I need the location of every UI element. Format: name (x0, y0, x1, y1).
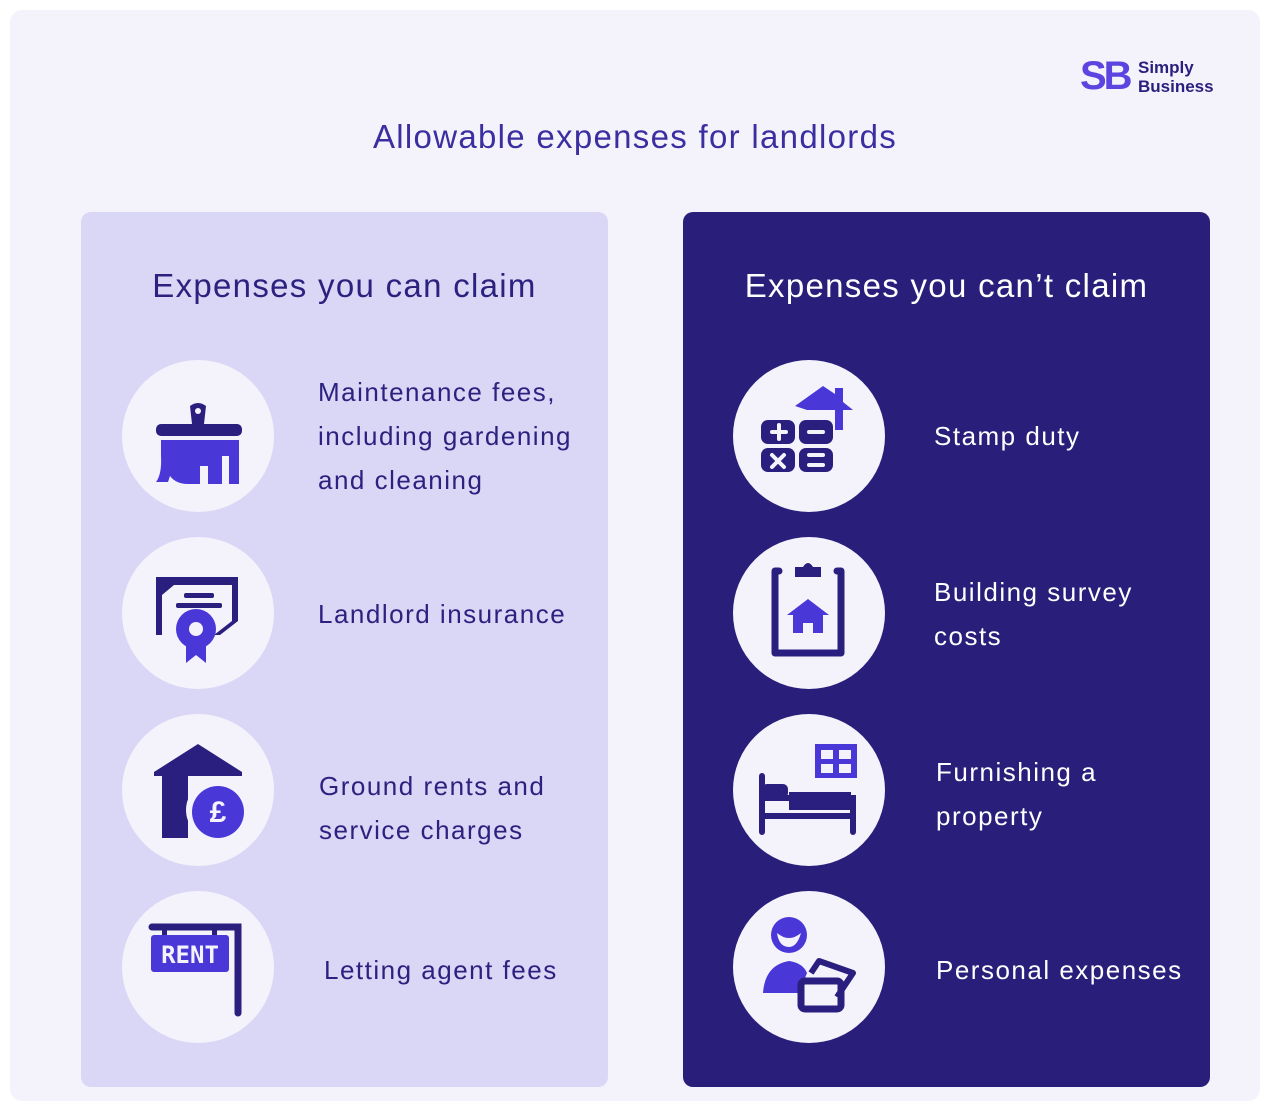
logo: Business (1138, 77, 1214, 96)
text: survey: costs (934, 621, 1002, 651)
heading: can claim: Expenses you can claim (152, 267, 537, 304)
text: maintenance: and cleaning (318, 465, 483, 495)
icon: calculator house (733, 360, 885, 512)
text: survey (934, 577, 1133, 651)
icon: person expenses (733, 891, 885, 1043)
text: maintenance: including gardening (318, 421, 572, 451)
panel: can claim (81, 212, 608, 1087)
icon: house pound: £ (210, 796, 227, 829)
icon: rent sign (122, 891, 274, 1043)
logo: Simply (1138, 58, 1194, 77)
icon: rent sign: RENT (161, 941, 219, 969)
text: furnishing: property (936, 801, 1043, 831)
text: furnishing: Furnishing a (936, 757, 1097, 787)
text: insurance: Landlord insurance (318, 599, 566, 629)
text: letting: Letting agent fees (324, 955, 558, 985)
text: ground rents: Ground rents and (319, 771, 545, 801)
logo: SB (1080, 54, 1130, 98)
text: maintenance (318, 377, 572, 495)
text: stamp duty: Stamp duty (934, 421, 1081, 451)
icon: certificate (122, 537, 274, 689)
text: maintenance: Maintenance fees, (318, 377, 556, 407)
text: survey: Building survey (934, 577, 1133, 607)
panel: can't claim (683, 212, 1210, 1087)
icon: house pound (122, 714, 274, 866)
icon: brush (122, 360, 274, 512)
text: furnishing (936, 757, 1097, 831)
text: ground rents: service charges (319, 815, 524, 845)
icon: bed (733, 714, 885, 866)
icon: clipboard (733, 537, 885, 689)
text: personal: Personal expenses (936, 955, 1183, 985)
title: Allowable expenses for landlords (373, 118, 897, 155)
text: ground rents (319, 771, 545, 845)
logo (1080, 54, 1214, 98)
heading: can't claim: Expenses you can’t claim (745, 267, 1148, 304)
